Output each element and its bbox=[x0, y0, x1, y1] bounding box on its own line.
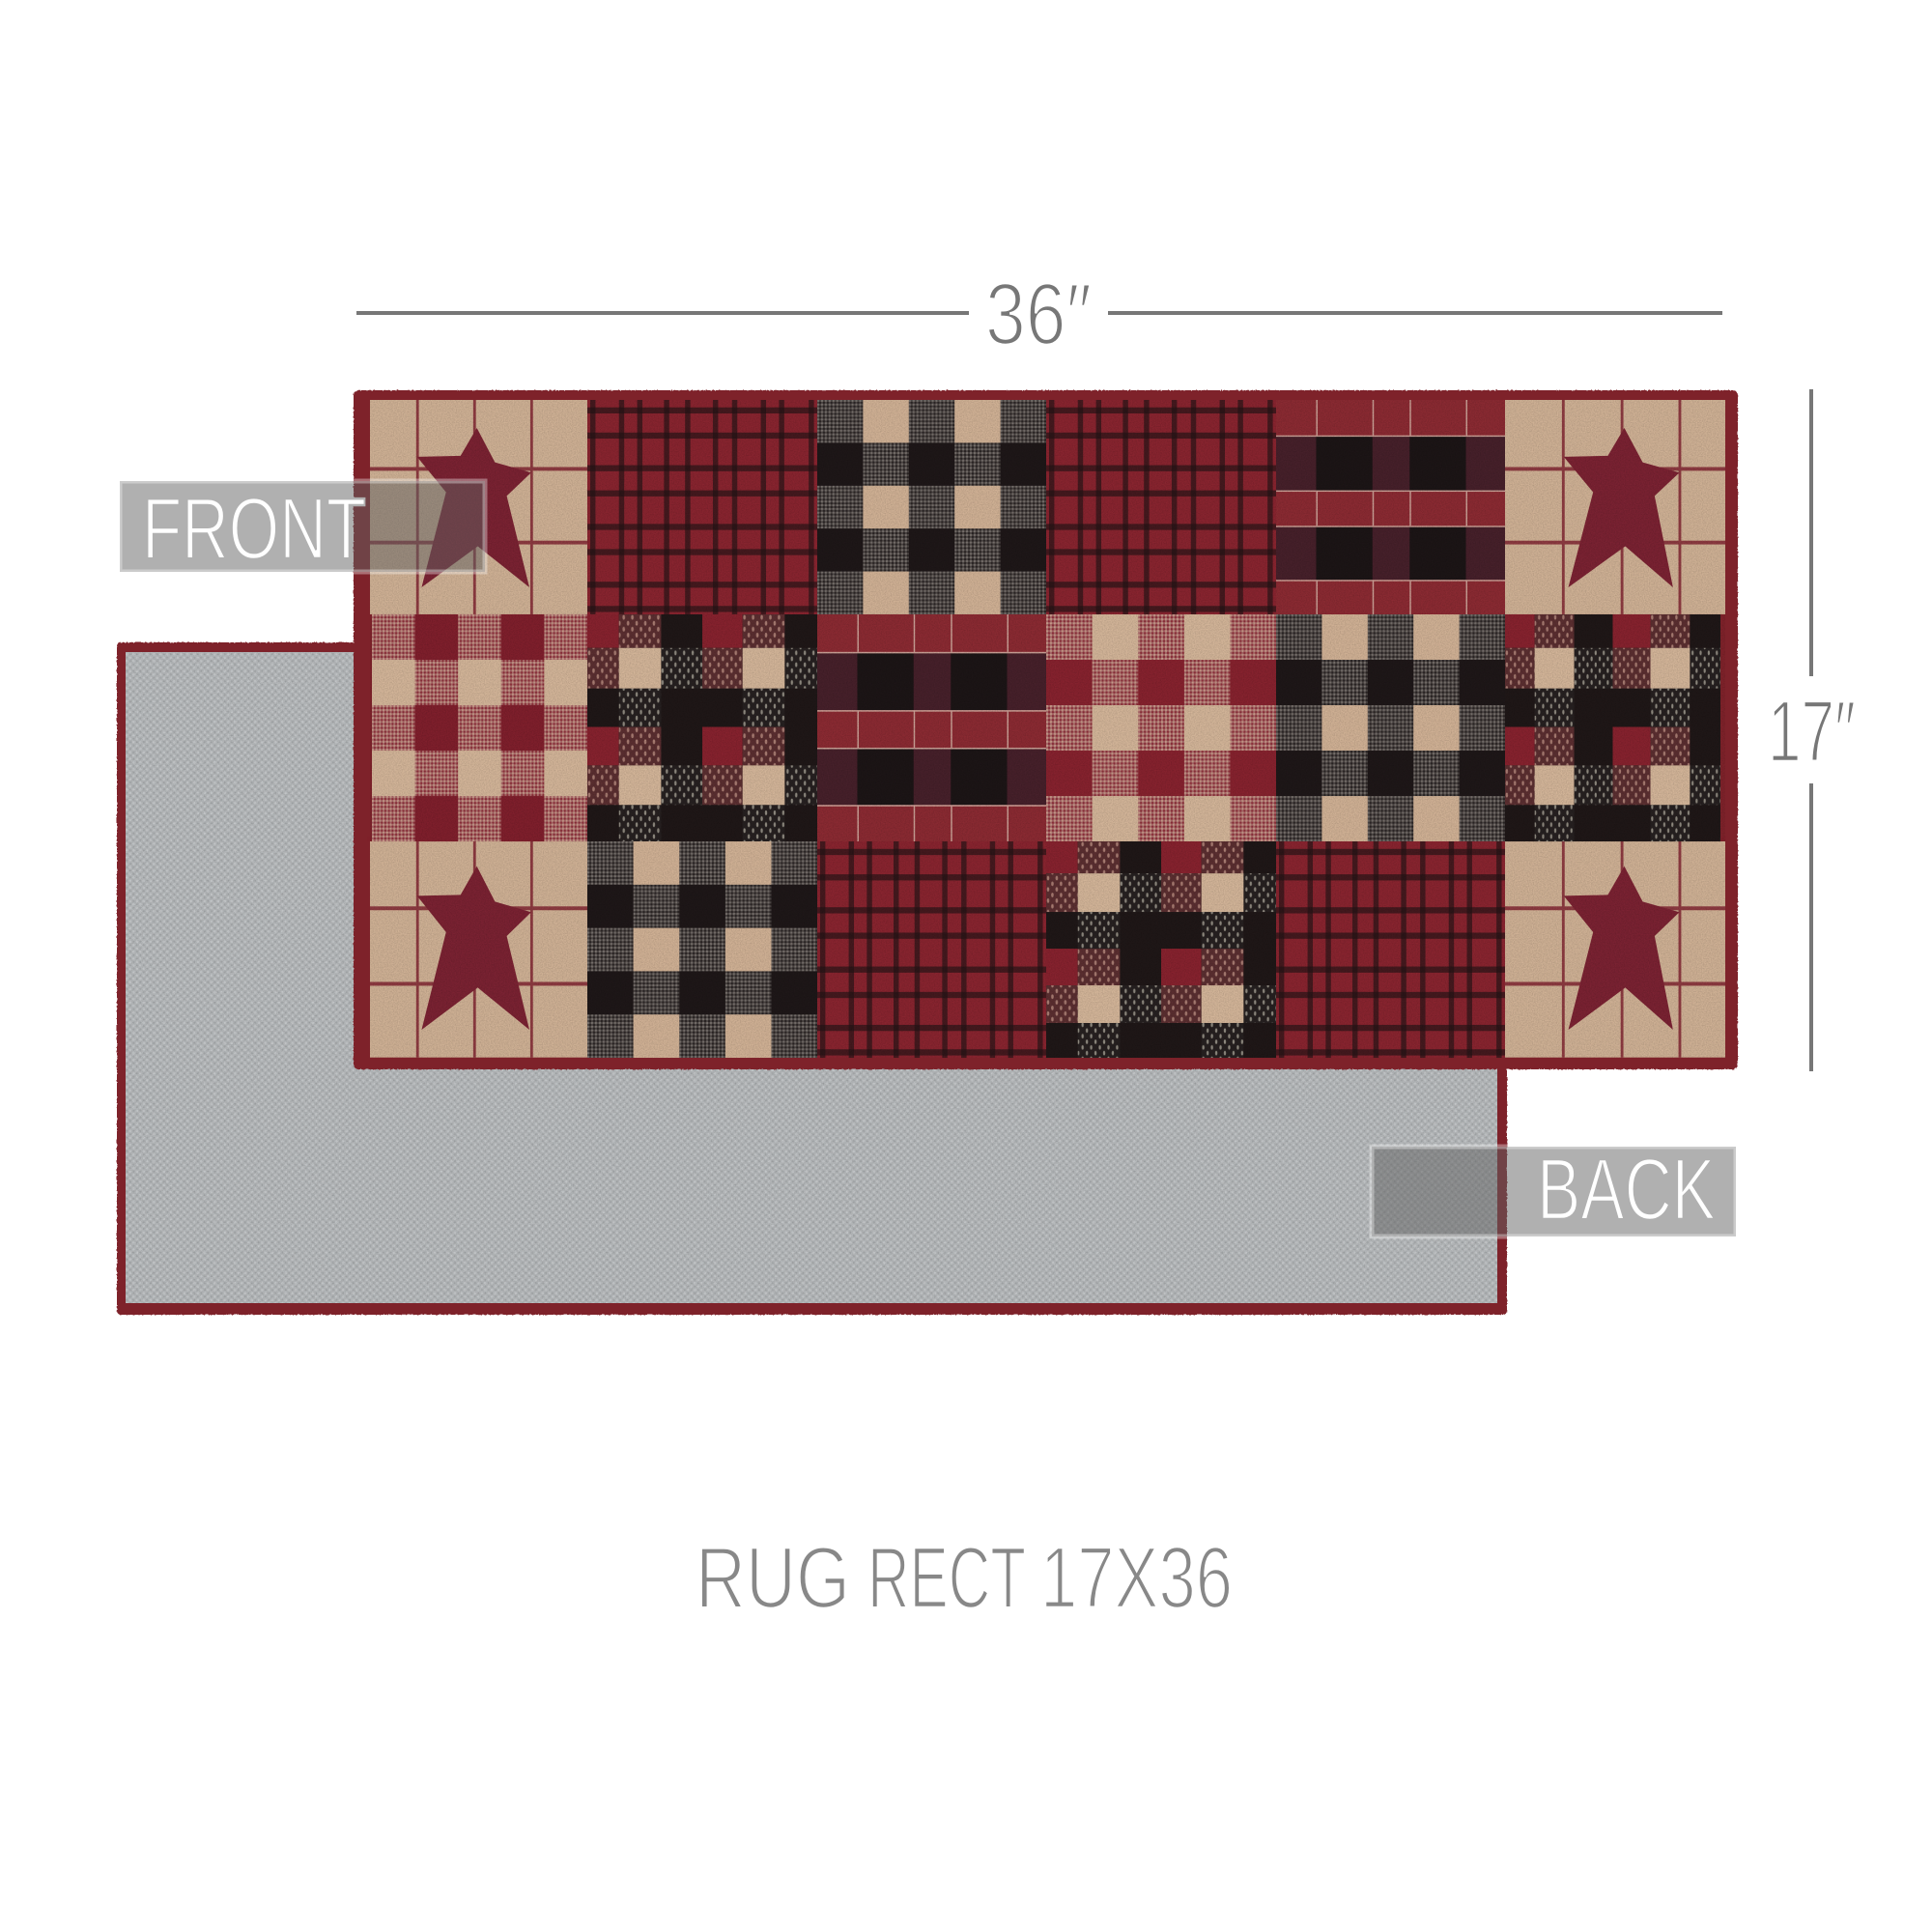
tile: patch check r2c2 bbox=[587, 614, 817, 841]
title: RECT bbox=[867, 1530, 1026, 1627]
title: 17X36 bbox=[1040, 1530, 1233, 1627]
title: RUG bbox=[696, 1530, 850, 1627]
tile: red bars r1c5 bbox=[1276, 400, 1505, 614]
rug back bbox=[117, 642, 1507, 1315]
tile: red gingham r2c1 bbox=[372, 614, 587, 841]
tile: star bottom left bbox=[370, 838, 587, 1058]
label: back: BACK bbox=[1537, 1142, 1716, 1238]
woven grain overlay bbox=[370, 400, 1725, 1058]
height dimension: 17 inches bbox=[1768, 389, 1856, 1071]
title bbox=[696, 1530, 1233, 1627]
tile: black buffalo check r1c3 bbox=[817, 400, 1046, 614]
tile: plaid r1c2 bbox=[587, 400, 817, 614]
tile: black buffalo check r2c5 bbox=[1276, 614, 1505, 841]
tile: red gingham r2c4 bbox=[1046, 614, 1276, 841]
tile: star bottom right bbox=[1505, 838, 1725, 1058]
width dimension: 36 inches bbox=[356, 267, 1722, 363]
tile: plaid r1c4 bbox=[1046, 400, 1276, 614]
tile: patch check r3c4 bbox=[1046, 841, 1276, 1058]
tile: plaid r3c3 bbox=[817, 841, 1046, 1058]
tile: patch check r2c6 bbox=[1505, 614, 1720, 841]
tile: black buffalo check r3c2 bbox=[587, 841, 817, 1058]
rug front border bbox=[354, 390, 1738, 1069]
tile: star top left bbox=[370, 400, 587, 614]
tile: red bars r2c3 bbox=[817, 614, 1046, 841]
rug front bbox=[354, 390, 1738, 1069]
label: back bbox=[1372, 1142, 1736, 1238]
label: front: FRONT bbox=[142, 481, 366, 578]
height dimension: 17 inches: 17″ bbox=[1768, 684, 1856, 781]
tile: plaid r3c5 bbox=[1276, 841, 1505, 1058]
width dimension: 36 inches: 36″ bbox=[985, 267, 1092, 363]
tile: star top right bbox=[1505, 400, 1725, 614]
